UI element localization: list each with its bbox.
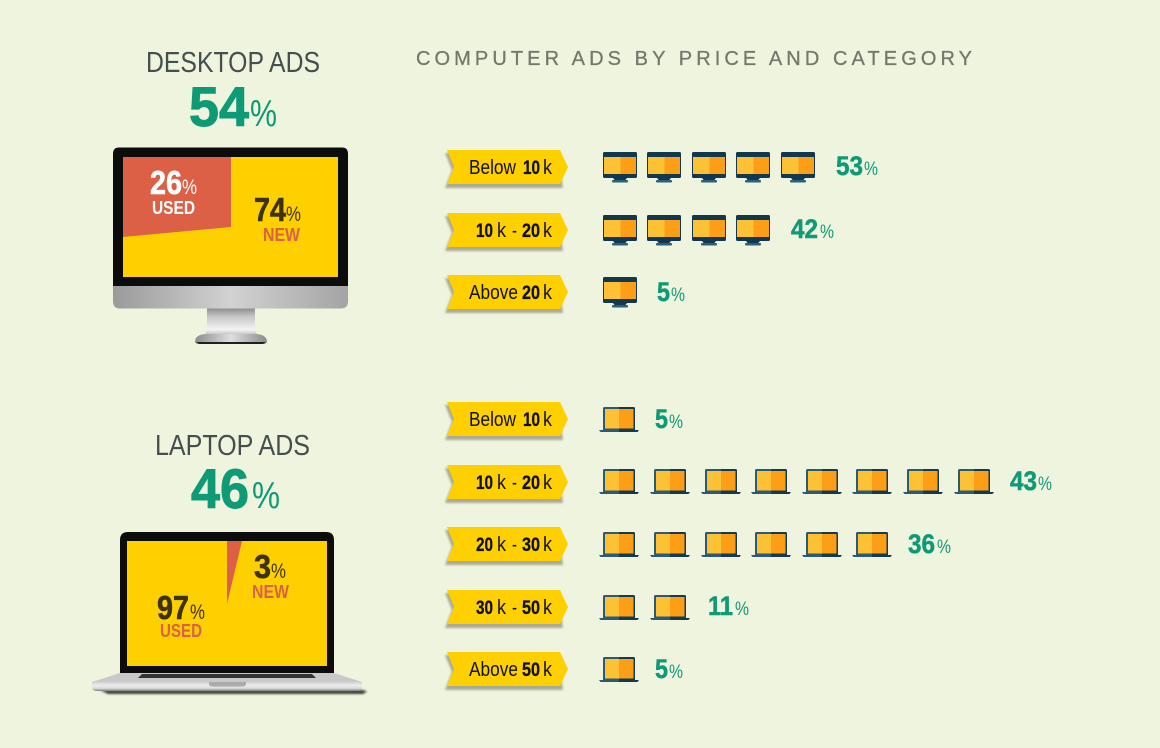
row: laptop 10k-20k, 43%: 10 (476, 473, 493, 494)
row: desktop above 20k, 5%: 5 (657, 277, 670, 307)
stat: 74% new (254, 191, 301, 245)
row: laptop 10k-20k, 43%: k (497, 472, 507, 494)
heading: laptop ads 46%: LAPTOP ADS (155, 430, 310, 462)
row: laptop 20k-30k, 36%: k (543, 534, 553, 556)
row: desktop 10k-20k, 42%: % (820, 222, 834, 243)
row: laptop 30k-50k, 11%: k (497, 597, 507, 619)
illustration: laptop with used/new split (92, 532, 367, 694)
row: desktop above 20k, 5%: k (543, 282, 553, 304)
stat: 97% used (157, 589, 205, 641)
stat: 3% new: NEW (252, 582, 289, 602)
row: desktop below 10k, 53%: Below (469, 157, 516, 179)
row: laptop 30k-50k, 11%: k (543, 597, 553, 619)
row: desktop above 20k, 5%: 20 (522, 283, 540, 304)
row: desktop below 10k, 53%: k (543, 157, 553, 179)
row: desktop 10k-20k, 42% (445, 213, 834, 251)
row: laptop above 50k, 5%: 5 (655, 654, 668, 684)
illustration: desktop monitor with used/new split (113, 148, 348, 344)
stat: 3% new: % (271, 560, 286, 583)
row: laptop 10k-20k, 43%: 43 (1010, 466, 1037, 496)
row: laptop below 10k, 5%: 5 (655, 404, 668, 434)
heading: desktop ads 54%: DESKTOP ADS (146, 47, 320, 79)
row: laptop below 10k, 5%: 10 (523, 410, 540, 431)
row: desktop above 20k, 5%: Above (469, 282, 518, 304)
row: laptop above 50k, 5%: % (669, 662, 683, 683)
row: desktop 10k-20k, 42%: 10 (476, 221, 493, 242)
row: desktop below 10k, 53% (445, 150, 878, 188)
stat: 97% used: USED (160, 621, 202, 641)
row: desktop above 20k, 5%: % (671, 285, 685, 306)
row: desktop above 20k, 5% (445, 275, 685, 313)
row: desktop 10k-20k, 42%: k (497, 220, 507, 242)
row: laptop 20k-30k, 36% (445, 527, 951, 565)
row: laptop 30k-50k, 11%: 30 (476, 598, 493, 619)
heading: laptop ads 46%: % (252, 475, 280, 517)
stat: 97% used: % (190, 601, 205, 624)
heading: laptop ads 46% (155, 430, 310, 520)
row: desktop 10k-20k, 42%: - (512, 220, 517, 242)
stat: 74% new: % (286, 203, 301, 226)
row: laptop above 50k, 5% (445, 652, 683, 690)
row: laptop 20k-30k, 36%: k (497, 534, 507, 556)
row: laptop 30k-50k, 11%: 50 (522, 598, 540, 619)
row: laptop 20k-30k, 36%: 36 (908, 529, 935, 559)
row: laptop 30k-50k, 11%: 11 (708, 591, 733, 621)
heading: computer ads by price and category: COMPUTER ADS BY PRICE AND CATEGORY (416, 48, 972, 70)
pie slice: used 26% (123, 157, 231, 237)
row: desktop 10k-20k, 42%: 20 (522, 221, 540, 242)
row: laptop above 50k, 5%: Above (469, 659, 518, 681)
row: laptop below 10k, 5% (445, 402, 683, 440)
row: laptop above 50k, 5%: k (543, 659, 553, 681)
row: laptop 20k-30k, 36%: % (937, 537, 951, 558)
stat: 3% new (252, 548, 289, 602)
row: laptop 10k-20k, 43%: % (1038, 474, 1052, 495)
row: laptop 10k-20k, 43% (445, 465, 1052, 503)
row: desktop 10k-20k, 42%: k (543, 220, 553, 242)
heading: desktop ads 54% (146, 47, 320, 138)
stat: 26% used: USED (152, 198, 195, 218)
row: laptop 20k-30k, 36%: 30 (522, 535, 540, 556)
row: laptop below 10k, 5%: k (543, 409, 553, 431)
heading: desktop ads 54%: % (250, 93, 277, 135)
stat: 26% used (150, 164, 197, 218)
row: laptop 30k-50k, 11%: - (512, 597, 517, 619)
stat: 74% new: NEW (263, 225, 300, 245)
stat: 26% used: 26 (150, 164, 182, 201)
stat: 97% used: 97 (157, 589, 189, 626)
row: desktop 10k-20k, 42%: 42 (791, 214, 818, 244)
row: laptop 10k-20k, 43%: k (543, 472, 553, 494)
row: laptop below 10k, 5%: % (669, 412, 683, 433)
stat: 74% new: 74 (254, 191, 287, 228)
stat: 26% used: % (182, 176, 197, 199)
row: laptop 20k-30k, 36%: 20 (476, 535, 493, 556)
row: desktop below 10k, 53%: 10 (523, 158, 540, 179)
row: laptop 10k-20k, 43%: 20 (522, 473, 540, 494)
heading: desktop ads 54%: 54 (189, 75, 249, 138)
stat: 3% new: 3 (254, 548, 271, 585)
pie slice: new 3% (227, 541, 242, 604)
row: laptop 30k-50k, 11%: % (735, 599, 749, 620)
row: laptop 30k-50k, 11% (445, 590, 749, 628)
row: laptop below 10k, 5%: Below (469, 409, 516, 431)
heading: laptop ads 46%: 46 (191, 457, 249, 520)
row: laptop 10k-20k, 43%: - (512, 472, 517, 494)
row: laptop above 50k, 5%: 50 (522, 660, 540, 681)
row: desktop below 10k, 53%: % (864, 159, 878, 180)
row: desktop below 10k, 53%: 53 (836, 151, 863, 181)
row: laptop 20k-30k, 36%: - (512, 534, 517, 556)
